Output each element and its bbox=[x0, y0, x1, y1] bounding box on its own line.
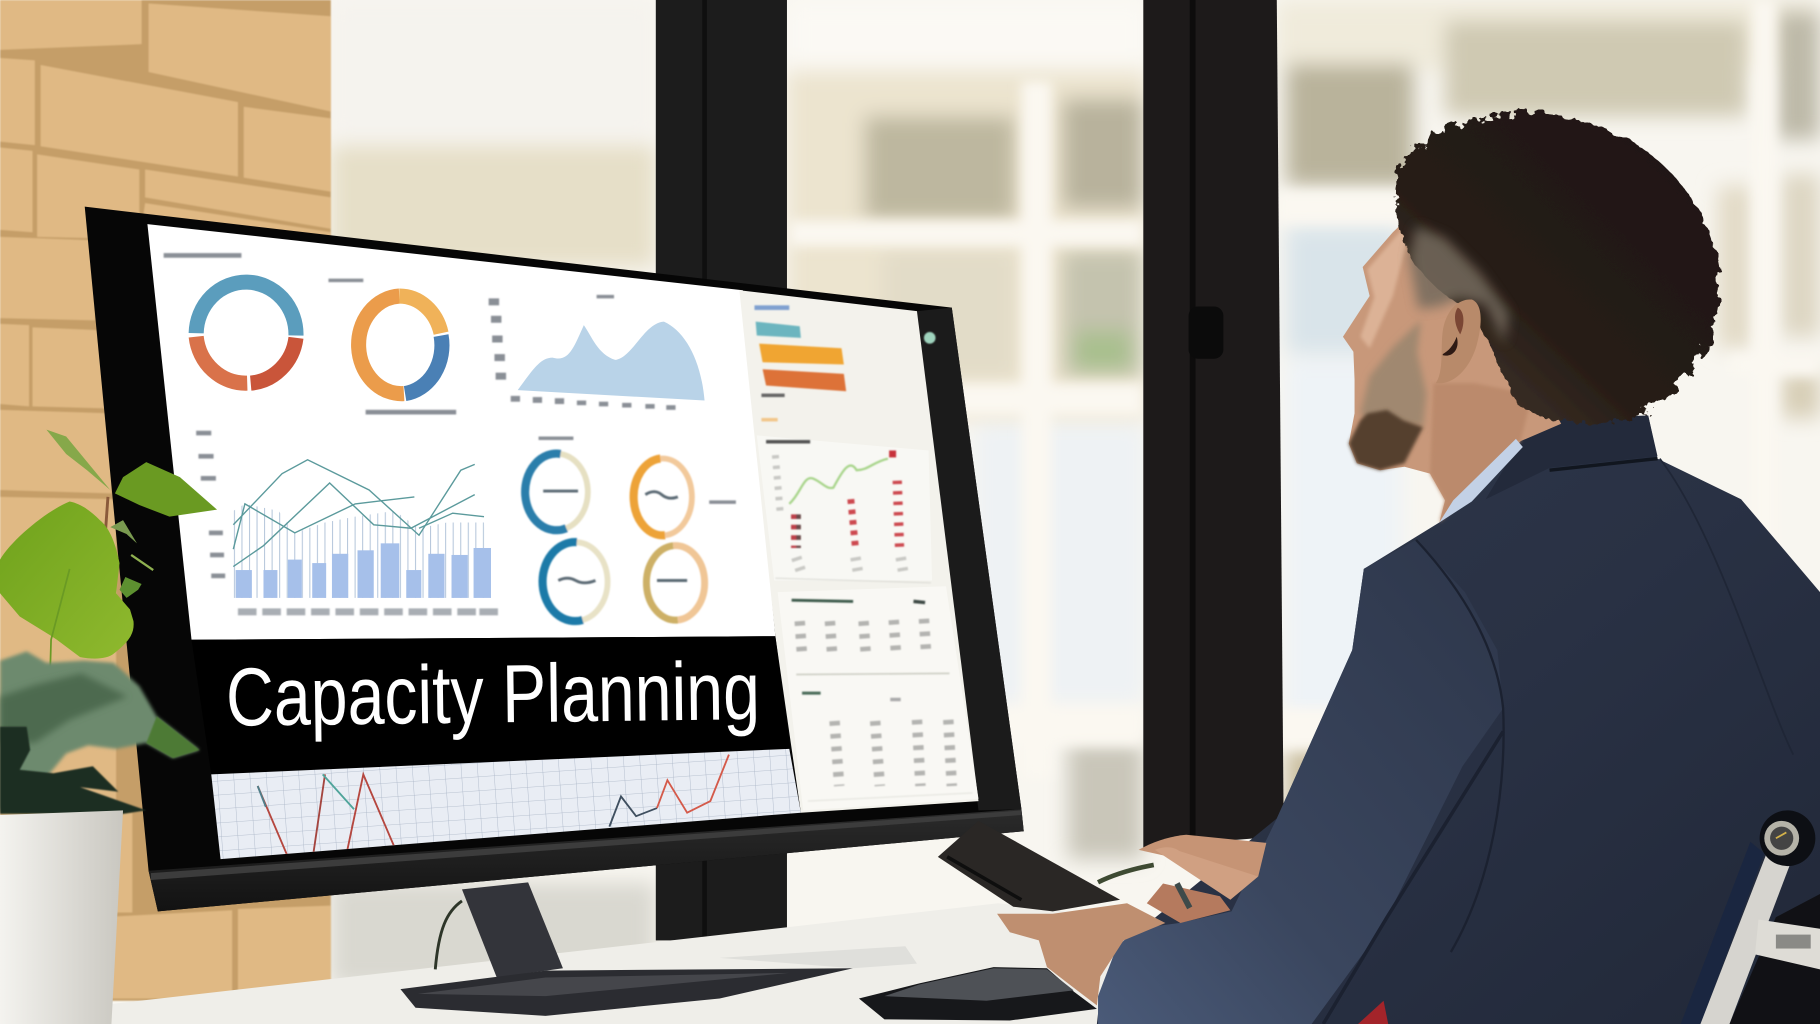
donut chart 2 bbox=[359, 296, 442, 394]
monitor screen: right side panel bbox=[739, 290, 978, 813]
person: ear bbox=[1436, 299, 1481, 383]
bar and line chart bbox=[233, 460, 498, 615]
bottom trend chart strip bbox=[211, 749, 801, 859]
monitor screen: main white panel bbox=[147, 224, 775, 640]
plant pot bbox=[0, 810, 123, 1024]
office chair bbox=[1681, 810, 1820, 1024]
plant bbox=[0, 430, 217, 814]
monitor stand bbox=[400, 882, 917, 1016]
side panel line chart with red marks bbox=[775, 450, 931, 583]
person: front hand bbox=[997, 903, 1165, 1005]
title band bbox=[192, 636, 790, 774]
stylus bbox=[1098, 865, 1154, 882]
person: jacket bbox=[1097, 416, 1820, 1024]
brick wall bbox=[0, 0, 331, 1001]
person: shirt collar bbox=[1439, 439, 1523, 522]
person: neck and face bbox=[1343, 210, 1561, 522]
person: back hand bbox=[1139, 835, 1266, 923]
side panel tables bbox=[792, 600, 973, 801]
window frames: dark columns bbox=[656, 0, 1284, 940]
dashboard small captions bbox=[164, 253, 736, 578]
desk bbox=[99, 903, 1114, 1024]
area chart bbox=[518, 322, 705, 401]
donut chart 1 bbox=[196, 282, 296, 383]
gauge rings bbox=[525, 454, 705, 621]
person: beard bbox=[1349, 320, 1427, 470]
keyboard bbox=[859, 967, 1097, 1021]
monitor bezel bbox=[85, 207, 1024, 911]
person: hair bbox=[1398, 113, 1720, 423]
tablet bbox=[938, 821, 1120, 911]
heading text: Capacity Planning bbox=[225, 645, 760, 744]
